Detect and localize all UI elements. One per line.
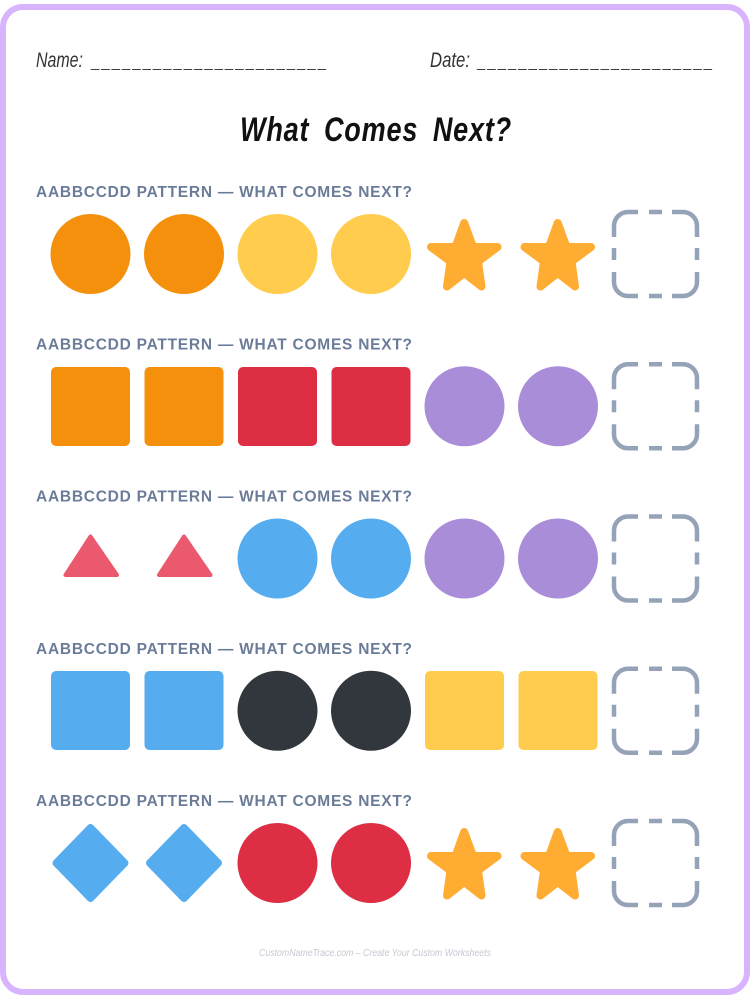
row 1 — [36, 184, 697, 296]
row 4 answer box — [614, 669, 697, 753]
row 3 label: AABBCCDD PATTERN — WHAT COMES NEXT? — [36, 488, 412, 506]
row 4 — [36, 641, 697, 753]
row 5 answer box — [614, 821, 697, 905]
row 4 shapes — [51, 671, 598, 751]
row 5 — [36, 793, 697, 905]
row 4 label: AABBCCDD PATTERN — WHAT COMES NEXT? — [36, 641, 412, 658]
row 2 answer box — [614, 364, 697, 448]
name field: _______________________ — [90, 54, 327, 71]
row 2 shapes — [51, 366, 598, 446]
name field — [36, 49, 327, 72]
row 5 shapes — [56, 823, 591, 903]
date field: _______________________ — [476, 54, 713, 71]
row 1 answer box — [614, 212, 697, 296]
row 3 — [36, 488, 697, 600]
row 1 shapes — [50, 214, 591, 294]
row 1 label: AABBCCDD PATTERN — WHAT COMES NEXT? — [36, 184, 412, 201]
row 3 answer box — [614, 516, 697, 600]
footer: CustomNameTrace.com – Create Your Custom Worksheets — [259, 947, 492, 959]
row 2 — [36, 336, 697, 448]
row 2 label: AABBCCDD PATTERN — WHAT COMES NEXT? — [36, 336, 412, 353]
row 5 label: AABBCCDD PATTERN — WHAT COMES NEXT? — [36, 793, 412, 810]
date field: Date: — [430, 49, 470, 72]
name field: Name: — [36, 49, 83, 72]
row 3 shapes — [66, 518, 598, 598]
date field — [430, 49, 713, 72]
title: What Comes Next? — [240, 111, 512, 149]
